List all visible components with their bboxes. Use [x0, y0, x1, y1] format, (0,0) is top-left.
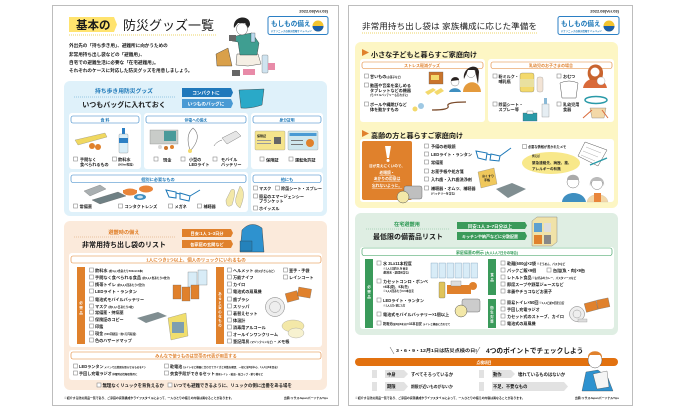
- footer: left page: 出典:リサスJapanパーソナルTips: [284, 395, 328, 400]
- bottom checklist: [97, 382, 292, 389]
- label: food: 食: [490, 272, 494, 277]
- label: essentials: [365, 259, 373, 328]
- icon: water bottles: [188, 270, 207, 287]
- icon: snack box: [425, 72, 444, 95]
- callout: vision reminder: [362, 141, 412, 200]
- checklist: essentials: 手間なく食べられる食品 (約1人1食あたり3食分): [95, 274, 170, 281]
- logo: right page: [558, 16, 619, 34]
- panel: individually needed items: 常備薬: [80, 203, 93, 210]
- checklist: food and sanitation: レトルト食品 ※お好みのカレー、パスタソースなど: [507, 274, 577, 280]
- heading: 在宅避難用: 在宅避難用: [394, 220, 420, 228]
- checklist: food and sanitation: 即席スープや野菜ジュースなど: [507, 281, 564, 287]
- intro text: 外出先の「持ち歩き用」、避難所に向かうための: [69, 42, 168, 49]
- label: food: [488, 259, 496, 295]
- tag: いつものバッグに: [182, 99, 233, 108]
- panel: individually needed items: 個別に必要なもの: [141, 176, 175, 183]
- header bar: inspection items: [355, 358, 618, 366]
- panel: outing essentials: LEDライト: [189, 161, 209, 167]
- checklist: food and sanitation: 簡易トイレ×50回 ※1人1日約5回を目安: [507, 299, 565, 305]
- checklist: food and sanitation: 電池式の扇風機: [507, 320, 537, 326]
- checklist: reassuring items: 筆記用具 (マジックペンなど)・メモ帳: [233, 338, 290, 344]
- inspection point: shortage: [479, 382, 568, 391]
- panel: baby items: 食器: [563, 106, 572, 112]
- logo: left page: パナソニックの防災情報サイトバッジ: [271, 29, 312, 33]
- icon: fan: [266, 298, 284, 316]
- inspection point: shortage: 不足、不要なもの: [493, 383, 527, 390]
- panel: outing essentials: [144, 113, 248, 169]
- heading: 持ち歩き用防災グッズ: 持ち歩き用防災グッズ: [95, 87, 153, 95]
- icon: storage shelf: [532, 217, 557, 246]
- panel: food: 食べられるもの: [80, 161, 109, 167]
- icon: insurance card: 保険証: [257, 133, 266, 138]
- tag: 目安: 目安:1人 1~3日分: [191, 230, 224, 237]
- checklist: senior items: (バッテリーを含む): [431, 192, 455, 196]
- bottom checklist: いつでも避難できるように、リュックの側に出番をある場を: [174, 382, 292, 389]
- checklist: reassuring items: オールインワンクリーム: [233, 331, 278, 337]
- panel: other items: [251, 172, 323, 212]
- illustration: elderly couple: [562, 175, 608, 202]
- panel: stock amounts: [360, 247, 614, 329]
- checklist: essentials: 電池式モバイルバッテリー×1個以上: [383, 311, 449, 317]
- title: 基本の: [69, 17, 117, 32]
- header bar: inspection items: 点検項目: [476, 360, 492, 365]
- panel: food: (500ml程度): [118, 162, 133, 166]
- inspection point: operation: [479, 370, 566, 378]
- icon: ration bar: [75, 133, 107, 150]
- label: essentials: [77, 267, 85, 344]
- checklist: reassuring items: 電池式の扇風機: [233, 288, 263, 294]
- panel: individually needed items: 補聴器: [204, 203, 217, 209]
- illustration: mother and child: [449, 67, 481, 92]
- callout: vision reminder: 忘れないように。: [372, 183, 402, 188]
- footer: left page: [64, 395, 328, 400]
- panel: stress relief goods: 動画や音楽を楽しめる: [370, 82, 411, 88]
- panel: identification: 運転免許証: [295, 156, 315, 162]
- label: reassuring items: の: [218, 324, 222, 328]
- panel: baby items: 乳幼児のお子さまの場合: [529, 62, 573, 68]
- checklist: essentials: 保険証のコピー: [95, 316, 124, 322]
- checklist: reassuring items: [228, 267, 314, 344]
- tag: 分散配置: キッチンや納戸などに分散配置: [462, 233, 518, 239]
- panel: food: [69, 113, 141, 169]
- icon: warmers: [584, 298, 610, 312]
- icon: glasses: [166, 190, 200, 201]
- label: reassuring items: [216, 267, 224, 344]
- icon: medicine packs: [84, 185, 126, 204]
- panel: portable goods: [64, 81, 327, 216]
- intro text: それぞれのケースに対応した防災グッズを用意しましょう。: [69, 67, 193, 74]
- label: reassuring items: も: [218, 318, 222, 323]
- info memo: 必要な情報が書かれたメモ: [528, 144, 566, 149]
- logo: left page: [268, 16, 328, 34]
- panel: right page: [348, 6, 632, 406]
- panel: shared items: 乾電池 (ライトなど機器に合わせてサイズと本数を確認。一般に単3形中心。1人1日3本目安): [170, 363, 278, 369]
- checklist: reassuring items: スリッパ: [233, 303, 249, 309]
- heading: inspection day: 3・6・9・12月1日は防災点検の日!: [396, 347, 478, 354]
- panel: food: 飲料水: [118, 156, 131, 163]
- icon: water bottles row: [431, 263, 478, 278]
- intro text: 非常用持ち出し袋などの「避難用」、: [69, 51, 145, 58]
- tag: いつものバッグに: いつものバッグに: [188, 100, 225, 108]
- icon: medicine notebook: おくすり: [482, 173, 494, 178]
- footer: right page: [355, 395, 619, 400]
- checklist: essentials: 色のハザードマップ: [95, 337, 132, 343]
- subheading: いつもバッグに入れておく: [82, 100, 166, 109]
- checklist: senior items: LEDライト・ランタン: [431, 151, 472, 157]
- icon: hearing aids: [226, 186, 244, 208]
- title: 防災グッズ一覧: 防災グッズ一覧: [123, 18, 214, 33]
- icon: medicine sheets: [137, 312, 167, 323]
- label: essentials: 必: [367, 284, 371, 289]
- panel: stock amounts: 家庭備蓄の例示 (大人1人7日分の場合): [456, 249, 518, 255]
- checklist: essentials: 乾電池(単3形6本分)×33本目安 ライトと機器に合わせて: [383, 321, 451, 326]
- intro text: 自宅での避難生活に必要な「在宅避難用」。: [69, 59, 159, 66]
- icon: warmers: [285, 287, 312, 302]
- label: reassuring items: と: [218, 300, 222, 305]
- inspection point: expiry: 期限: [387, 383, 396, 390]
- checklist: essentials: 現金 (500円硬貨・約1万円程度): [95, 330, 136, 336]
- icon: notebook and pen: [578, 142, 607, 166]
- label: essentials: 需: [79, 305, 83, 310]
- icon: pouch: [239, 89, 264, 108]
- tag: 目安: [182, 229, 233, 237]
- icon: diaper: [560, 81, 578, 98]
- inspection point: operation: 壊れているものはないか: [518, 371, 566, 378]
- icon: tableware: [282, 320, 304, 338]
- icon: fan: [570, 306, 587, 322]
- checklist: essentials: [90, 267, 170, 343]
- panel: individually needed items: コンタクトレンズ: [124, 203, 157, 209]
- label: sanitation: 衛: [490, 305, 494, 310]
- icon: medicine sheets: [496, 183, 526, 198]
- checklist: essentials: ※1人1回あたり0.5本目安: [383, 289, 414, 293]
- panel: shared items: みんなで使うものは世帯の代表が用意する: [155, 352, 237, 360]
- panel: baby items: 乳幼児用: [563, 101, 579, 107]
- panel: stress relief goods: 甘いもの(お菓子など): [370, 73, 401, 79]
- checklist: essentials: LEDライト・ランタン: [95, 288, 137, 295]
- panel: other items: 除菌シート・スプレー: [281, 185, 322, 191]
- panel: outing essentials: 停電への備え: [185, 118, 208, 122]
- label: reassuring items: 安: [218, 304, 222, 310]
- icon: contact lenses: [123, 186, 153, 200]
- panel: individually needed items: メガネ: [174, 203, 187, 209]
- checklist: food and sanitation: カセット式のストーブ、カイロ: [507, 313, 564, 319]
- checklist: essentials: ※1人1灯+家に1灯: [383, 304, 405, 308]
- checklist: reassuring items: 体温計: [233, 317, 245, 323]
- label: reassuring items: る: [218, 296, 222, 300]
- panel: shared items: 手回し充電ラジオ 停電時の情報収集用に: [79, 370, 138, 376]
- subheading: 最低限の備蓄品リスト: [373, 232, 443, 241]
- label: essentials: 需: [367, 289, 371, 294]
- panel: identification: 身分証明: [279, 118, 295, 122]
- panel: shared items: 衣食手段ができるセット 簡易トイレ・紙皿・紙コップ・割り箸など: [170, 370, 264, 376]
- label: sanitation: 対: [490, 314, 494, 319]
- checklist: essentials: LEDライト・ランタン: [383, 297, 424, 303]
- info memo: [522, 144, 580, 174]
- icon: lantern: [455, 299, 480, 317]
- panel: identification: [251, 113, 323, 169]
- icon: lantern: [397, 186, 422, 203]
- icon: driver license: [288, 131, 318, 150]
- checklist: essentials: カセットコンロ・ボンベ: [383, 278, 428, 284]
- footer: right page: 出典:リサスJapanパーソナルTips: [575, 395, 619, 400]
- panel: other items: ブランケット: [259, 198, 284, 204]
- panel: food: 手間なく: [80, 156, 96, 162]
- panel: outing essentials: 小型の: [189, 156, 201, 162]
- panel: baby items: 哺乳瓶: [498, 78, 512, 84]
- panel: left page: [52, 6, 338, 406]
- icon: backpack: [240, 224, 264, 252]
- inspection point: expiry: 期限が近いものがないか: [411, 384, 453, 389]
- label: essentials: 品: [367, 295, 371, 299]
- icon: medicine notebook: 手帳: [484, 177, 490, 182]
- panel: emergency bag list: [64, 221, 327, 390]
- icon: cassette stove: [439, 281, 477, 298]
- checklist: reassuring items: レインコート: [289, 275, 314, 280]
- info memo: アレルギーの有無: [532, 166, 561, 171]
- panel: stress relief goods: ボールや縄跳びなど: [370, 101, 408, 107]
- checklist: senior items: 入れ歯・入れ歯洗浄剤: [431, 176, 472, 182]
- callout: vision reminder: 目が見えにくいので、: [369, 163, 405, 168]
- checklist: essentials: ※1人1日約3Lを目安: [383, 266, 408, 270]
- inspection point: contents: すべてそろっているか: [411, 371, 454, 378]
- checklist: reassuring items: 万能ナイフ: [233, 274, 253, 280]
- checklist: food and sanitation: 手回し充電ラジオ: [507, 306, 540, 312]
- illustration: person checking list: [582, 351, 613, 391]
- panel: baby items: スプレー等: [498, 106, 519, 112]
- label: reassuring items: 心: [218, 309, 222, 314]
- panel: individual backpack items: 1人につき1つ以上、個人のリュックにいれるもの: [146, 256, 246, 264]
- checklist: essentials: [377, 260, 451, 326]
- panel: stress relief goods: [360, 59, 485, 122]
- illustration: mother and baby: [583, 64, 607, 88]
- panel: family-specific preparation: [355, 42, 618, 208]
- checklist: essentials: (飲料水・調理用含む): [383, 270, 409, 274]
- panel: shared items: LEDランタン メインで広範囲を照らせるものを1つ: [79, 363, 146, 369]
- heading: small children: 小さな子どもと暮らすご家庭向け: [371, 50, 477, 59]
- panel: individually needed items: [69, 172, 248, 212]
- checklist: essentials: 水 2Lx11本程度: [383, 260, 412, 266]
- date label: 2022.08(Ver.03): [299, 8, 329, 14]
- checklist: reassuring items: ヘルメット (防災ずきんなど): [233, 268, 275, 273]
- callout: vision reminder: あかりの用意は: [374, 176, 400, 181]
- checklist: senior items: 予備の老眼鏡: [431, 143, 456, 149]
- checklist: essentials: マスク (約1人1日あたり3枚): [95, 303, 134, 309]
- checklist: essentials: 飲料水 (約1人1食あたり500ml×3本): [95, 267, 143, 274]
- panel: outing essentials: バッテリー: [221, 161, 241, 167]
- checklist: senior items: 補聴器・オムツ、補聴器: [431, 185, 476, 191]
- inspection point: contents: [372, 370, 454, 378]
- panel: senior items: [360, 139, 614, 203]
- logo: right page: もしもの備え: [561, 19, 601, 28]
- label: sanitation: [488, 299, 496, 328]
- tag: 目安: 目安:1人 3~7日分以上: [468, 223, 513, 230]
- checklist: essentials: 電池式モバイルバッテリー: [95, 296, 144, 302]
- label: reassuring items: あ: [218, 291, 222, 296]
- checklist: reassuring items: 着替えセット: [233, 310, 258, 316]
- icon: water bottle: [119, 128, 128, 153]
- panel: shared items: [69, 350, 322, 380]
- checklist: senior items: 常備薬: [431, 159, 443, 165]
- bottom checklist: 無理なくリュックを背負えるか: [102, 382, 164, 389]
- label: essentials: 品: [79, 311, 83, 315]
- label: reassuring items: な: [218, 314, 222, 318]
- panel: stress relief goods: タブレットなどの機器: [370, 87, 412, 93]
- checklist: reassuring items: 歯ブラシ: [233, 296, 249, 302]
- inspection point: operation: 動作: [493, 371, 502, 378]
- icon: baby tableware: [583, 96, 608, 118]
- tag: コンパクトに: コンパクトに: [192, 90, 220, 96]
- inspection point: expiry: [372, 382, 453, 391]
- checklist: essentials: 携帯トイレ (約1人1回あたり7回分): [95, 281, 145, 288]
- heading: inspection day: [390, 346, 583, 355]
- tag: コンパクトに: [182, 88, 233, 97]
- panel: baby items: 粉ミルク・: [498, 73, 519, 79]
- checklist: senior items: [424, 143, 476, 196]
- intro text: [69, 42, 193, 74]
- subheading: 非常用持ち出し袋のリスト: [82, 240, 166, 249]
- icon: wipes and spray: [523, 98, 549, 121]
- checklist: food and sanitation: パックご飯×9個: [507, 267, 536, 273]
- panel: home evacuation stock: [355, 213, 618, 335]
- checklist: food and sanitation: 缶詰(魚・肉)×9缶: [553, 267, 585, 273]
- icon: balls and jump rope: [412, 102, 466, 112]
- panel: baby items: おむつ: [563, 73, 575, 79]
- title: 非常用持ち出し袋は 家族構成に応じた準備を: [362, 21, 537, 31]
- callout: vision reminder: 老眼鏡・: [379, 170, 395, 175]
- icon: LED necklace: [188, 128, 197, 153]
- inspection point: contents: 中身: [387, 371, 396, 378]
- checklist: food and sanitation: 乾麺(600g)×2袋 ※そうめん、パスタなど: [507, 260, 566, 266]
- title: 基本の: 基本の: [76, 18, 110, 32]
- icon: food packs: [173, 285, 199, 301]
- panel: other items: 他にも: [281, 176, 293, 183]
- panel: other items: ホイッスル: [259, 205, 279, 211]
- info memo: 緊急連絡先、病歴、薬、: [532, 160, 572, 165]
- heading: inspection day: 4つのポイントでチェックしよう: [486, 346, 583, 355]
- tag: 各家庭の玄関など: [182, 240, 233, 248]
- icon: glasses: [476, 148, 511, 161]
- footer: right page: ※紹介する防災用品一覧であり、ご家庭の家族構成やライフスタイルによって、一人ひとりの備えの内容は異なることがあります。: [355, 395, 525, 400]
- checklist: reassuring items: 軍手・手袋: [289, 267, 309, 273]
- panel: stress relief goods: (モバイルバッテリーも忘れずに): [370, 93, 408, 97]
- heading: seniors: 高齢の方と暮らすご家庭向け: [371, 131, 463, 140]
- logo: left page: もしもの備え: [271, 19, 311, 28]
- icon: medicine notebook: [478, 168, 497, 188]
- panel: outing essentials: 現金: [163, 156, 172, 164]
- checklist: senior items: お薬手帳や処方箋: [431, 168, 464, 174]
- panel: food: 食 料: [100, 116, 110, 122]
- date label: 2022.08(Ver.03): [590, 8, 620, 14]
- icon: hazard map: [168, 313, 188, 340]
- tag: 目安: [457, 222, 527, 230]
- label: sanitation: 生: [490, 310, 494, 314]
- label: sanitation: 策: [490, 318, 494, 324]
- panel: stress relief goods: ストレス軽減グッズ: [404, 62, 440, 68]
- panel: identification: 保険証: [266, 156, 279, 164]
- icon: cash: [150, 130, 178, 150]
- label: essentials: 必: [79, 300, 83, 305]
- info memo: 例えば: [532, 154, 540, 158]
- checklist: food and sanitation: 羊羹やチョコなどお菓子: [507, 288, 552, 294]
- label: food: 品: [490, 278, 494, 282]
- icon: mobile battery: [214, 131, 241, 146]
- panel: other items: 簡易のエマージェンシー: [259, 193, 304, 199]
- checklist: reassuring items: 消毒用アルコール: [233, 324, 266, 330]
- tag: 分散配置: [457, 232, 527, 240]
- panel: baby items: [488, 59, 614, 122]
- icon: milk can and bottle: [520, 73, 543, 92]
- checklist: food and sanitation: [501, 260, 585, 326]
- checklist: essentials: ×6本(夏)、9本(冬): [383, 284, 409, 289]
- tag: 各家庭の玄関など: 各家庭の玄関など: [190, 241, 225, 248]
- checklist: reassuring items: カイロ: [233, 281, 245, 287]
- checklist: essentials: 印鑑: [95, 323, 103, 329]
- logo: right page: パナソニックの防災情報サイトバッジ: [561, 29, 602, 33]
- footer: left page: ※紹介する防災用品一覧であり、ご家庭の家族構成やライフスタイルによって、一人ひとりの備えの内容は異なることがあります。: [64, 395, 234, 400]
- panel: stress relief goods: 体を動かすもの: [370, 106, 399, 112]
- panel: individual backpack items: [69, 253, 322, 347]
- heading: 避難時の備え: 避難時の備え: [108, 228, 140, 236]
- panel: outing essentials: モバイル: [221, 157, 237, 162]
- illustration: person with bag: [216, 17, 275, 76]
- panel: other items: マスク: [259, 185, 271, 191]
- panel: baby items: 除菌シート・: [498, 101, 523, 107]
- checklist: essentials: 常備薬・持病薬: [95, 309, 124, 315]
